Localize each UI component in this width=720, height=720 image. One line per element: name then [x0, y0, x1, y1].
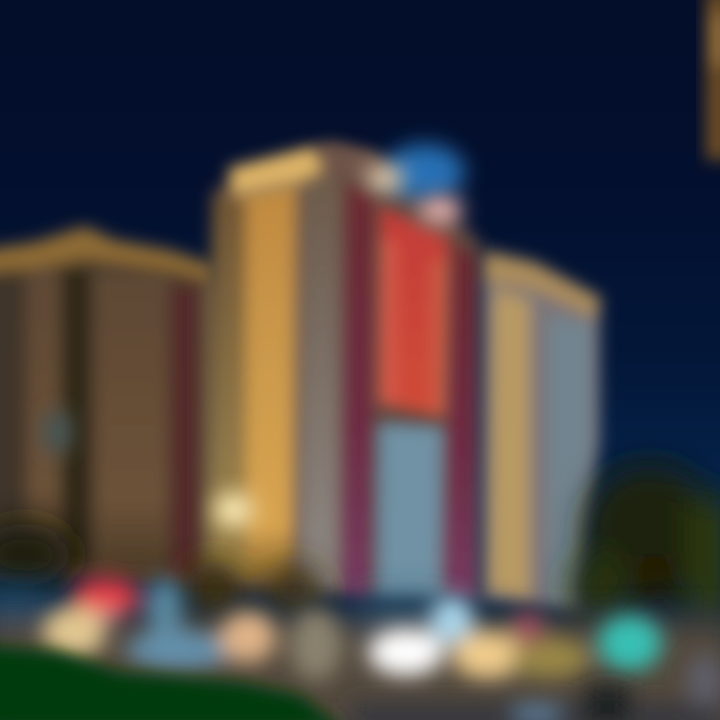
orange highlight right [432, 260, 446, 415]
grey column [300, 170, 342, 590]
palm trees on the right [570, 464, 720, 621]
central roof cap [228, 146, 325, 198]
teal sign [598, 615, 662, 671]
peach light [220, 611, 276, 663]
pale blue light [430, 596, 474, 644]
tan light left [42, 606, 106, 658]
pale lower panel [378, 425, 442, 600]
red facade panel [378, 205, 450, 418]
gold tower face [246, 185, 296, 585]
crimson column [340, 178, 376, 600]
central building base [208, 145, 480, 600]
red sign [72, 577, 140, 617]
left building roofline [0, 226, 215, 282]
tan light right [452, 631, 524, 679]
blue dome [385, 144, 465, 200]
right wing [482, 250, 602, 610]
blue glint on left building [44, 410, 72, 454]
right wing roofline [484, 250, 602, 318]
street level band [0, 588, 720, 720]
pale roof glints [365, 164, 463, 224]
white light [368, 628, 444, 676]
green lawn in the foreground [0, 645, 345, 720]
distant light at top right [706, 0, 720, 160]
gold tower side [208, 190, 250, 585]
street lights and signs [42, 577, 662, 681]
crimson column right [442, 240, 480, 600]
bright spot on gold tower [214, 492, 254, 528]
upper roof shoulder [320, 142, 385, 178]
dark foreground at lower right [350, 654, 720, 720]
pink glint [512, 612, 544, 644]
left building [0, 226, 222, 590]
grey light [290, 609, 342, 681]
orange highlight left [380, 240, 396, 405]
blue lights [147, 578, 183, 638]
olive sign [510, 638, 590, 678]
shrubs at the building base [0, 523, 325, 620]
